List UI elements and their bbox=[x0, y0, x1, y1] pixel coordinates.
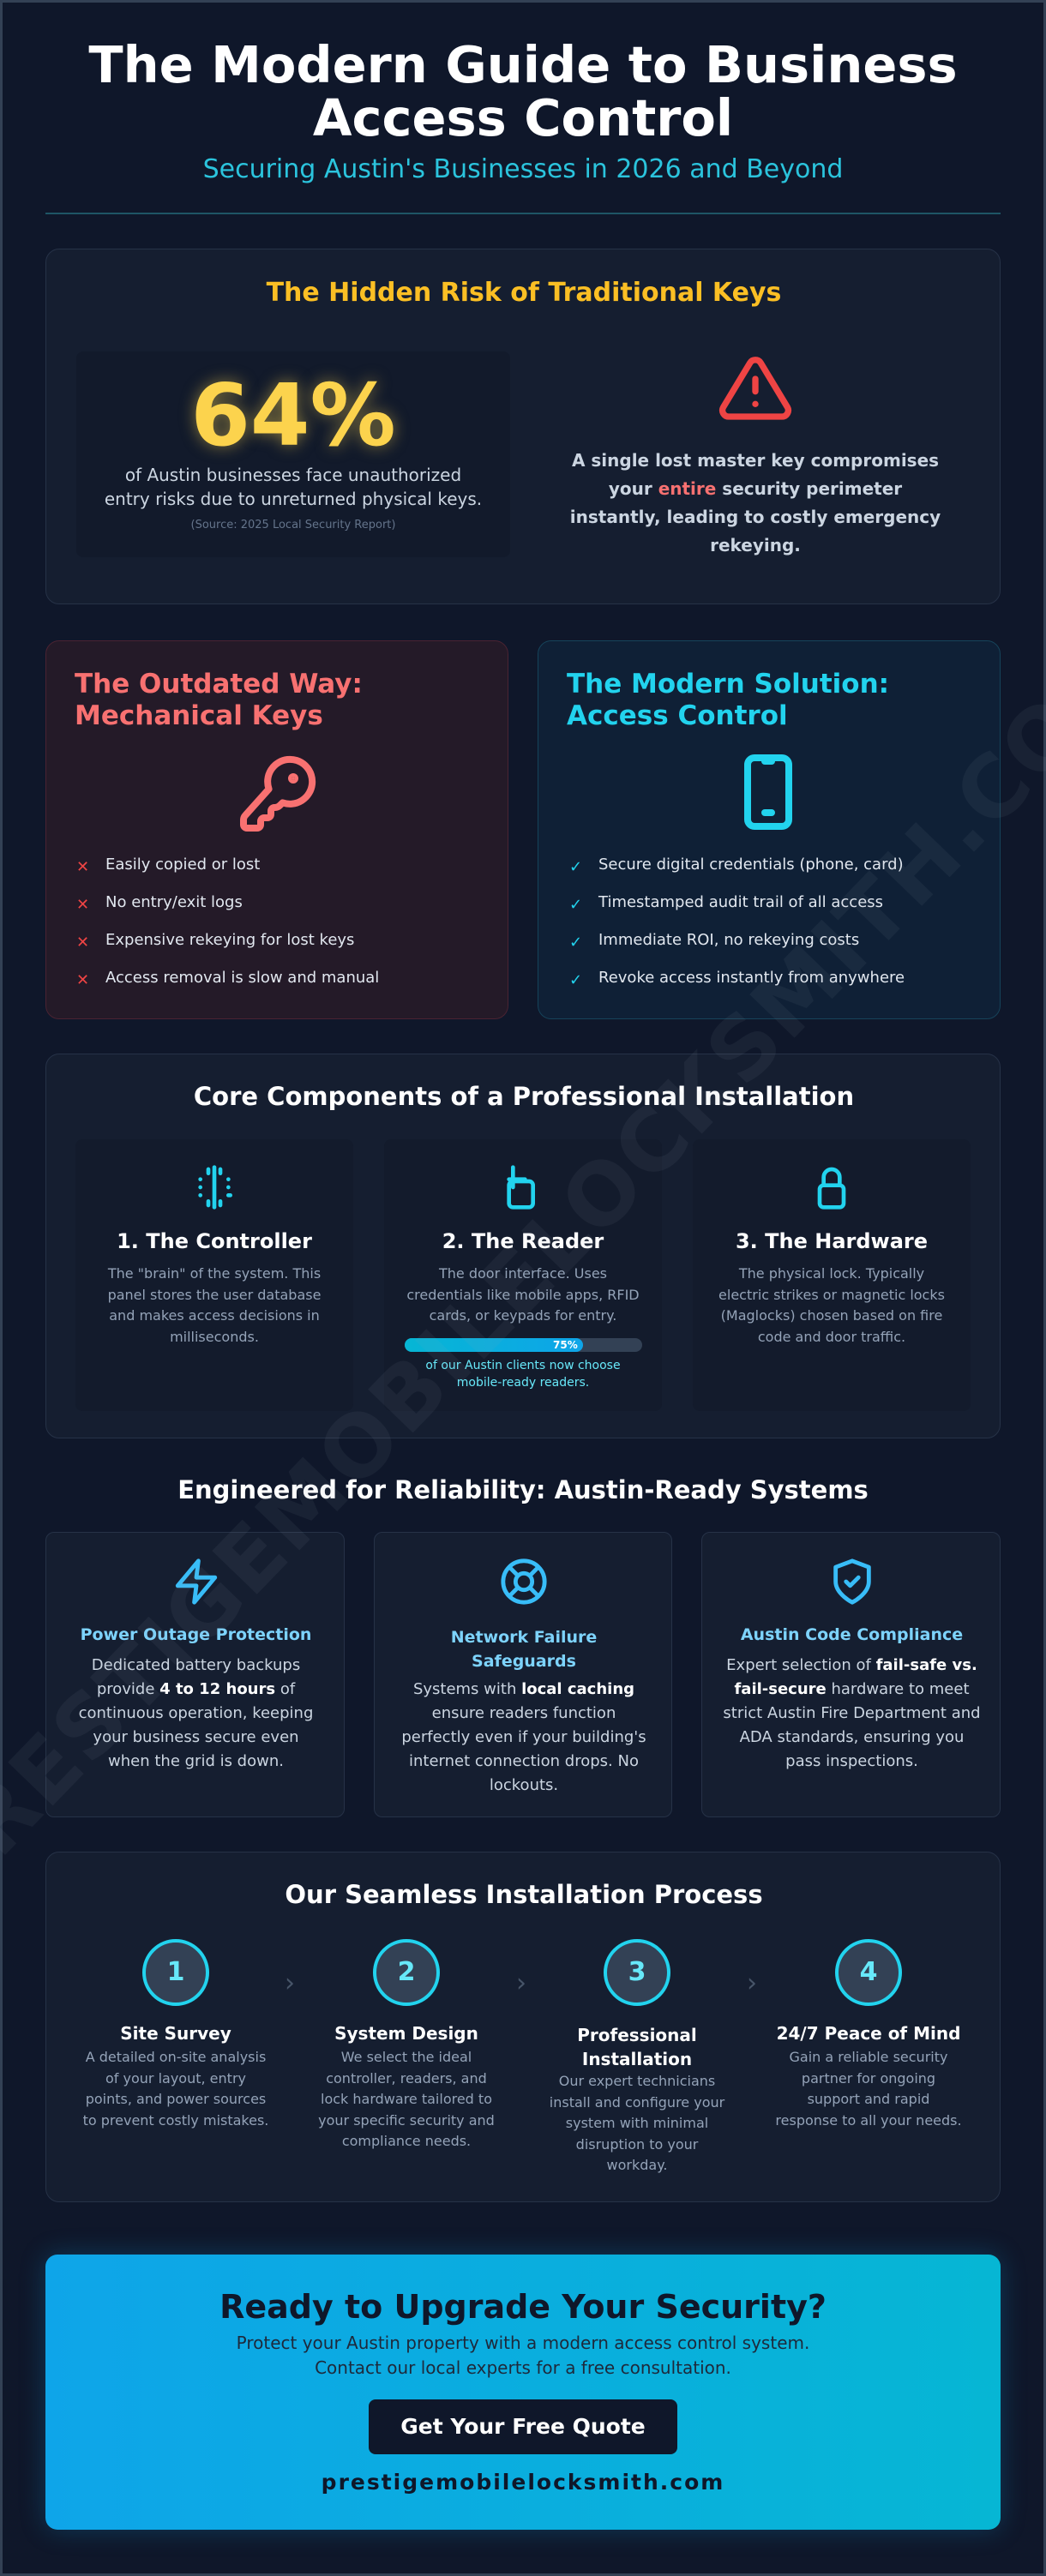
step 3 bbox=[550, 1939, 725, 2173]
card: hardware bbox=[693, 1139, 971, 1411]
heading: outdated: The Outdated Way: bbox=[75, 669, 363, 700]
step 4: 4 bbox=[860, 1957, 877, 1987]
icon: controller bbox=[198, 1165, 232, 1210]
button: Get Your Free Quote bbox=[400, 2414, 646, 2439]
panel: installation process bbox=[45, 1852, 1001, 2202]
heading: hidden risk: The Hidden Risk of Traditional Keys bbox=[267, 278, 781, 308]
list: benefits bbox=[569, 856, 905, 989]
step 3: Installation bbox=[582, 2049, 692, 2069]
step 3: Our expert technicians install and configure your system with minimal disruption to your workday. bbox=[550, 2073, 724, 2173]
list: drawbacks bbox=[76, 856, 379, 989]
list: drawbacks: Expensive rekeying for lost keys bbox=[105, 931, 354, 949]
stat box: 64% bbox=[76, 351, 510, 557]
arrow 1: › bbox=[285, 1968, 295, 1998]
list: benefits: Timestamped audit trail of all access bbox=[598, 893, 883, 911]
icon: lifebuoy bbox=[501, 1558, 547, 1605]
panel: outdated way bbox=[45, 640, 508, 1019]
list: benefits: ✓ bbox=[569, 934, 582, 952]
card: controller bbox=[75, 1139, 353, 1411]
heading: modern bbox=[567, 669, 889, 731]
heading: modern: The Modern Solution: bbox=[567, 669, 889, 700]
step 2: System Design bbox=[334, 2023, 478, 2044]
card: reader: The door interface. Uses credentials like mobile apps, RFID cards, or keypads for entry. bbox=[406, 1265, 640, 1324]
step 2: 2 bbox=[398, 1957, 415, 1987]
step 3: 3 bbox=[628, 1957, 646, 1987]
card: code compliance: Expert selection of fail-safe vs. fail-secure hardware to meet strict Austin Fire Department and ADA standards, ensuring you pass inspections. bbox=[723, 1656, 981, 1770]
list: drawbacks: Easily copied or lost bbox=[105, 856, 260, 874]
button bbox=[369, 2399, 677, 2454]
arrow 2: › bbox=[516, 1968, 526, 1998]
list: drawbacks: ✕ bbox=[76, 971, 89, 989]
arrow 3: › bbox=[747, 1968, 757, 1998]
step 4: 24/7 Peace of Mind bbox=[777, 2023, 960, 2044]
heading: reliability: Engineered for Reliability: Austin-Ready Systems bbox=[177, 1475, 869, 1504]
icon: shield bbox=[833, 1558, 871, 1605]
bar chart: 75%: 75% bbox=[553, 1339, 578, 1351]
step 1: 1 bbox=[167, 1957, 184, 1987]
card: hardware: The physical lock. Typically electric strikes or magnetic locks (Maglocks) chosen based on fire code and door traffic. bbox=[718, 1265, 945, 1344]
callout: CTA: prestigemobilelocksmith.com bbox=[322, 2470, 724, 2495]
heading: outdated: Mechanical Keys bbox=[75, 700, 323, 731]
step 1 bbox=[83, 1939, 268, 2128]
card: network failure: Systems with local caching ensure readers function perfectly even if your building's internet connection drops. No lockouts. bbox=[401, 1680, 646, 1794]
text: master key warning: A single lost master key compromises your entire security perimeter instantly, leading to costly emergency rekeying. bbox=[570, 450, 941, 555]
stat box: 64%: of Austin businesses face unauthorized bbox=[125, 465, 461, 485]
title bbox=[88, 35, 958, 147]
title: Access Control bbox=[313, 88, 733, 147]
panel: hidden risk bbox=[45, 249, 1001, 604]
step 4: Gain a reliable security partner for ongoing support and rapid response to all your needs. bbox=[775, 2049, 962, 2128]
stat box: 64%: entry risks due to unreturned physical keys. bbox=[105, 489, 482, 509]
callout: CTA: Protect your Austin property with a modern access control system. bbox=[237, 2333, 809, 2353]
list: benefits: ✓ bbox=[569, 971, 582, 989]
icon: bolt bbox=[175, 1558, 218, 1605]
heading: outdated bbox=[75, 669, 363, 731]
step 1: A detailed on-site analysis of your layout, entry points, and power sources to prevent costly mistakes. bbox=[83, 2049, 268, 2128]
bar chart: 75% bbox=[405, 1338, 642, 1352]
list: drawbacks: Access removal is slow and manual bbox=[105, 969, 379, 987]
stat box: 64%: (Source: 2025 Local Security Report) bbox=[191, 519, 395, 531]
list: drawbacks: No entry/exit logs bbox=[105, 893, 243, 911]
callout: CTA bbox=[45, 2255, 1001, 2530]
list: benefits: ✓ bbox=[569, 896, 582, 914]
list: benefits: Secure digital credentials (phone, card) bbox=[598, 856, 904, 874]
subtitle: Securing Austin's Businesses in 2026 and Beyond bbox=[203, 154, 843, 184]
card: reader: mobile-ready readers. bbox=[457, 1376, 589, 1390]
callout: CTA: Contact our local experts for a free consultation. bbox=[315, 2357, 731, 2378]
card: reader: 2. The Reader bbox=[442, 1229, 604, 1253]
step 2: We select the ideal controller, readers, and lock hardware tailored to your specific security and compliance needs. bbox=[318, 2049, 495, 2149]
card: reader: of our Austin clients now choose bbox=[425, 1359, 621, 1372]
stat box: 64%: 64% bbox=[190, 365, 396, 465]
icon: lock bbox=[818, 1168, 845, 1210]
step 3: Professional bbox=[577, 2025, 697, 2045]
list: drawbacks: ✕ bbox=[76, 896, 89, 914]
list: benefits: Immediate ROI, no rekeying costs bbox=[598, 931, 859, 949]
panel: core components bbox=[45, 1054, 1001, 1438]
card: power outage bbox=[45, 1532, 345, 1817]
list: drawbacks: ✕ bbox=[76, 858, 89, 876]
list: benefits: Revoke access instantly from anywhere bbox=[598, 969, 905, 987]
heading: core components: Core Components of a Professional Installation bbox=[194, 1082, 854, 1111]
card: power outage: Dedicated battery backups provide 4 to 12 hours of continuous operation, keeping your business secure even when the grid is down. bbox=[79, 1656, 313, 1770]
heading: modern: Access Control bbox=[567, 700, 788, 731]
icon: phone bbox=[744, 754, 792, 830]
icon: key bbox=[240, 756, 316, 832]
step 1: Site Survey bbox=[120, 2023, 231, 2044]
panel: modern solution bbox=[538, 640, 1001, 1019]
list: drawbacks: ✕ bbox=[76, 934, 89, 952]
heading: process: Our Seamless Installation Process bbox=[285, 1880, 763, 1909]
card: network failure bbox=[374, 1532, 672, 1817]
step 4 bbox=[775, 1939, 962, 2128]
card: controller: 1. The Controller bbox=[117, 1229, 312, 1253]
callout: CTA: Ready to Upgrade Your Security? bbox=[219, 2288, 827, 2326]
card: controller: The "brain" of the system. This panel stores the user database and makes access decisions in milliseconds. bbox=[108, 1265, 321, 1344]
card: network failure: Network Failure bbox=[451, 1628, 597, 1647]
icon: reader bbox=[507, 1165, 535, 1210]
title: The Modern Guide to Business bbox=[88, 35, 958, 94]
card: power outage: Power Outage Protection bbox=[81, 1625, 311, 1644]
card: code compliance: Austin Code Compliance bbox=[741, 1625, 963, 1644]
card: hardware: 3. The Hardware bbox=[736, 1229, 928, 1253]
step 2 bbox=[318, 1939, 495, 2149]
icon: warning bbox=[718, 357, 792, 420]
card: network failure: Safeguards bbox=[472, 1652, 576, 1671]
list: benefits: ✓ bbox=[569, 858, 582, 876]
card: code compliance bbox=[701, 1532, 1001, 1817]
card: reader bbox=[384, 1139, 662, 1411]
